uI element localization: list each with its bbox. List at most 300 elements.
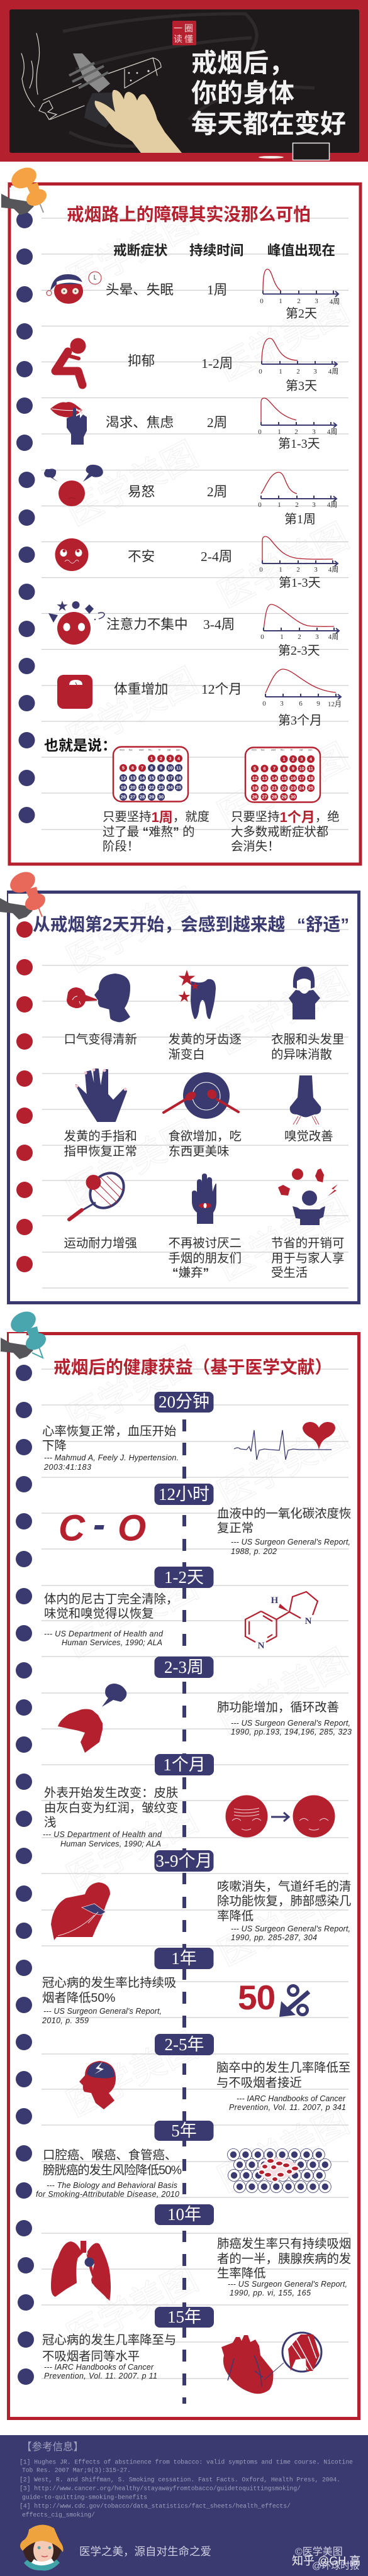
milestone: 5 years: --- The Biology and Behavioral Basis — [47, 2181, 177, 2190]
text: 医学美图 — [60, 2025, 204, 2124]
milestone: 3-9 months — [51, 1850, 351, 1942]
milestone: 20 minutes: 下降 — [42, 1439, 67, 1453]
pin: coral — [0, 868, 48, 919]
chart: day 2 peak: 3 — [315, 297, 318, 305]
blackboard — [9, 9, 359, 153]
calendar: one week: 19 — [121, 785, 126, 790]
calendar: one week: 18 — [176, 775, 181, 781]
chart: week 1 peak: 2 — [295, 501, 299, 509]
calendar: one week: 25 — [176, 785, 181, 790]
header: blackboard banner — [0, 0, 368, 162]
row: dizziness, insomnia — [47, 269, 340, 321]
text: 医学美图 — [211, 516, 355, 615]
icon: angry face — [44, 465, 103, 506]
icon: depressed person — [55, 338, 86, 385]
timeline dashes — [182, 1419, 186, 2404]
item: sense of smell — [284, 1075, 333, 1143]
calendar: one week: 1 — [150, 756, 153, 761]
column headers: 戒断症状 — [113, 243, 168, 258]
calendar: one month: 3 — [300, 756, 303, 762]
icon: nicotine molecule — [245, 1592, 318, 1651]
chart: days 2-3 peak: 1 — [280, 633, 284, 641]
panel title: 戒烟路上的障碍其实没那么可怕 — [67, 205, 311, 224]
title — [191, 48, 346, 138]
calendar: one week: 4 — [177, 756, 181, 761]
calendar: one week: 22 — [149, 785, 154, 790]
time pill: 1-2天 — [164, 1568, 204, 1587]
row: dizziness, insomnia: 头晕、失眠 — [106, 282, 174, 297]
item: savings: 受生活 — [271, 1266, 308, 1280]
calendar: one month: sun — [308, 748, 312, 751]
milestone: 1 year: 冠心病的发生率比持续吸 — [42, 1976, 176, 1990]
milestone: 1 month: 由灰白变为红润，皱纹变 — [44, 1801, 178, 1815]
icon: tooth with stars — [179, 970, 216, 1019]
row: irritability: 2周 — [207, 484, 227, 499]
milestone: 3-9 months: 咳嗽消失，气道纤毛的清 — [217, 1880, 351, 1894]
chart: month 3 peak: 9 — [316, 700, 320, 708]
chart: days 2-3 peak: 2 — [298, 633, 301, 641]
calendar: one week — [113, 747, 188, 801]
milestone: 3-9 months: 除功能恢复，肺部感染几 — [217, 1894, 351, 1908]
item: hands and nails: 发黄的手指和 — [64, 1130, 137, 1143]
row: difficulty concentrating — [48, 601, 339, 658]
chart: day 3 peak: 2 — [296, 368, 300, 375]
milestone: 10 years: 生率降低 — [217, 2267, 266, 2280]
calendar: one month: 6 — [263, 766, 266, 771]
calendar: one month: 4 — [309, 756, 313, 762]
row: restlessness — [55, 536, 338, 590]
milestone: 2-3 weeks: --- US Surgeon General's Report, — [231, 1719, 350, 1728]
item: whiter teeth — [169, 970, 242, 1062]
item: fresh breath — [64, 974, 137, 1046]
calendar: one month: 14 — [272, 775, 277, 781]
item: savings — [271, 1169, 344, 1280]
item: exercise endurance: 运动耐力增强 — [64, 1236, 137, 1250]
icon: head with brain bolt — [79, 2061, 116, 2109]
text: one week note: 只要坚持1周，就度 — [103, 809, 209, 825]
row: weight gain: 第3个月 — [278, 713, 322, 728]
calendar: one month: 5 — [254, 766, 256, 771]
milestone: 15 years — [42, 2307, 321, 2394]
text: 医学美图 — [60, 1113, 204, 1213]
item: savings: 用于与家人享 — [271, 1252, 344, 1265]
text: 医学美图 — [60, 434, 204, 533]
pin: teal — [1, 1307, 49, 1359]
calendar: one month: 21 — [272, 785, 277, 791]
icon: woman silhouette — [289, 967, 320, 1019]
text: one week note: 阶段！ — [103, 840, 139, 853]
stamp: 一圈 — [174, 23, 195, 33]
milestone: 10 years: 1990, pp. vi, 155, 165 — [230, 2289, 311, 2297]
chart: day 2 peak: 2 — [297, 297, 301, 305]
calendar: one week: sun — [176, 748, 180, 751]
item: odor disappears: 的异味消散 — [271, 1048, 332, 1062]
row: depression — [55, 338, 338, 393]
time pill: 15年 — [167, 2307, 201, 2326]
calendar: one week: 21 — [140, 785, 145, 790]
icon: person with hobbies — [278, 1169, 338, 1225]
chart: days 1-3 peak — [259, 536, 338, 574]
text: 医学美图 — [60, 1566, 204, 1665]
milestone: 2-5 years: --- IARC Handbooks of Cancer — [237, 2094, 346, 2103]
milestone: 3-9 months: 1990, pp. 285-287, 304 — [231, 1933, 317, 1942]
calendar: one month: wed — [271, 748, 276, 751]
text: 医学美图 — [211, 2101, 355, 2200]
chart: days 2-3 peak: 3 — [315, 633, 319, 641]
panel title: 从戒烟第2天开始， — [33, 914, 182, 935]
text: 医学美图 — [211, 289, 355, 389]
text: 医学美图 — [60, 201, 204, 301]
chart: week 1 peak: 3 — [312, 501, 316, 509]
milestone: 1 month: Human Services, 1990; ALA — [60, 1840, 161, 1848]
icon: ECG and heart — [234, 1422, 335, 1460]
row: difficulty concentrating: 第2-3天 — [278, 643, 320, 658]
calendar: one week: 2 — [160, 756, 162, 761]
calendar: one month: 2 — [292, 756, 294, 762]
milestone: 5 years: for Smoking-Attributable Disease, 2010 — [36, 2190, 179, 2199]
row: craving, anxiety: 2周 — [207, 415, 227, 430]
calendar: one month — [245, 747, 320, 802]
calendar: one month: 26 — [252, 794, 257, 800]
milestone: 5 years: 口腔癌、喉癌、食管癌、 — [43, 2148, 177, 2162]
icon: palm with eye — [192, 1174, 216, 1224]
calendar: one week: 8 — [150, 765, 153, 771]
text: 医学美图 — [60, 1799, 204, 1898]
chart: days 1-3 peak — [258, 398, 337, 436]
item: whiter teeth: 发黄的牙齿逐 — [169, 1033, 242, 1046]
milestone: 2-5 years: 与不吸烟者接近 — [216, 2076, 302, 2090]
milestone: 10 years: 肺癌发生率只有持续吸烟 — [217, 2237, 351, 2251]
chalk tray — [259, 143, 330, 160]
row: craving, anxiety: 第1-3天 — [278, 436, 320, 451]
chart: days 1-3 peak: 4周 — [328, 565, 338, 574]
item: no secondhand smoke: “嫌弃” — [172, 1266, 209, 1280]
chart: days 1-3 peak: 4周 — [327, 428, 337, 436]
icon: nicotine molecule: H — [271, 1596, 279, 1606]
milestone: 15 years: 不吸烟者同等水平 — [42, 2350, 140, 2363]
milestone: 1 year — [42, 1948, 309, 2025]
milestone: 2-5 years — [79, 2034, 350, 2112]
milestone: 1 year: 烟者降低50% — [42, 1991, 115, 2005]
calendar: one month: 24 — [299, 785, 304, 791]
milestone: 2-5 years: Prevention, Vol. 11. 2007, p 341 — [229, 2103, 346, 2112]
row: irritability: 易怒 — [128, 484, 155, 499]
text: 医学美图 — [211, 1641, 355, 1741]
time pill: 1个月 — [163, 1755, 206, 1774]
calendar: one week: mon — [120, 748, 125, 751]
milestone: 1-2 days: --- US Department of Health and — [44, 1629, 164, 1638]
chart: day 2 peak: 4周 — [330, 297, 340, 306]
calendar: one week: 10 — [167, 765, 173, 771]
icon: tennis racket — [69, 1167, 131, 1219]
row: craving, anxiety: 渴求、焦虑 — [106, 415, 174, 430]
icon: head with breath — [67, 974, 130, 1022]
calendar: one week: sat — [167, 748, 171, 751]
row: weight gain: 12个月 — [201, 682, 242, 697]
item: no secondhand smoke: 不再被讨厌二 — [169, 1236, 242, 1250]
watermark credits: @环球时报 — [312, 2561, 359, 2571]
watermark credits: ©医学美图 — [295, 2546, 343, 2557]
milestone: 20 minutes: 2003:41:183 — [43, 1463, 91, 1472]
item: savings: 节省的开销可 — [271, 1236, 344, 1250]
chart: days 1-3 peak: 3 — [312, 428, 316, 436]
chart: month 3 peak — [262, 669, 342, 708]
milestone: 10 years: --- US Surgeon General's Report, — [228, 2280, 347, 2289]
calendar: one month: 12 — [252, 775, 257, 781]
milestone: 1 year: --- US Surgeon General's Report, — [43, 2007, 162, 2016]
calendar: one week: 9 — [160, 765, 162, 771]
text: 医学美图 — [211, 1189, 355, 1288]
text: one week note — [103, 809, 209, 853]
chart: day 2 peak: 0 — [260, 297, 264, 305]
stamp — [172, 21, 196, 45]
column headers: 峰值出现在 — [267, 243, 335, 258]
chart: day 2 peak: 1 — [279, 297, 282, 305]
item: odor disappears — [271, 967, 344, 1062]
watermark credits — [292, 2546, 360, 2571]
calendar: one week: 5 — [122, 765, 125, 771]
reference list: effects_cig_smoking/ — [22, 2512, 95, 2518]
text: one week note: 过了最 “难熬” 的 — [103, 825, 195, 839]
reference list: Tob Res. 2007 Mar;9(3):315-27. — [22, 2467, 131, 2474]
calendar: one week: 15 — [149, 775, 154, 781]
time pill — [155, 2307, 214, 2328]
calendar: one month: 7 — [273, 766, 276, 771]
time pill: 12小时 — [159, 1485, 209, 1504]
chart: day 3 peak: 3 — [313, 368, 317, 375]
milestone: 1 year: 2010, p. 359 — [42, 2016, 89, 2025]
chart: days 2-3 peak: 0 — [260, 633, 264, 641]
chart: month 3 peak: 6 — [299, 700, 303, 708]
milestone: 2-3 weeks: 肺功能增加，循环改善 — [217, 1701, 339, 1714]
row: irritability — [44, 465, 337, 526]
chart: week 1 peak: 4周 — [327, 501, 337, 509]
slogan: 医学之美，源自对生命之爱 — [79, 2545, 211, 2558]
row: depression: 1-2周 — [201, 356, 233, 371]
calendar: one week: 27 — [130, 794, 135, 800]
row: difficulty concentrating: 3-4周 — [203, 617, 235, 632]
chart: days 1-3 peak: 2 — [296, 566, 300, 574]
icon: cells — [228, 2148, 331, 2192]
calendar: one month: 25 — [308, 785, 313, 791]
milestone: 10 years: 者的一半，胰腺疾病的发 — [217, 2252, 351, 2266]
chart: days 2-3 peak: 4周 — [328, 633, 338, 641]
panel: withdrawal symptoms — [1, 164, 360, 864]
calendar: one month: 30 — [291, 794, 296, 800]
time pill: 2-5年 — [165, 2035, 204, 2054]
calendar: one week: 20 — [130, 785, 135, 790]
chart: days 1-3 peak: 0 — [259, 566, 263, 574]
calendar: one week: tue — [129, 748, 133, 751]
panel title: 戒烟后的健康获益（基于医学文献） — [53, 1357, 332, 1377]
milestone: 1-2 days: 体内的尼古丁完全清除， — [44, 1592, 178, 1606]
milestone: 5 years — [36, 2121, 331, 2199]
reference list: guide-to-quitting-smoking-benefits — [22, 2494, 147, 2501]
milestone: 5 years: 膀胱癌的发生风险降低50% — [43, 2163, 182, 2177]
icon: plate with spoons — [164, 1072, 238, 1119]
time pill — [155, 1754, 214, 1775]
icon: nose — [290, 1075, 321, 1124]
text: 医学美图 — [60, 1340, 204, 1439]
row: craving, anxiety — [50, 398, 337, 451]
item: whiter teeth: 渐变白 — [169, 1048, 205, 1062]
calendar: one week: 14 — [140, 775, 145, 781]
calendar: one month: 10 — [299, 766, 304, 771]
calendar: one month: 28 — [272, 794, 277, 800]
calendar: one month: 13 — [262, 775, 267, 781]
calendar: one week: 29 — [149, 794, 154, 800]
text: 医学美图 — [60, 2258, 204, 2357]
calendar: one week: fri — [159, 748, 160, 751]
text: 医学美图 — [60, 880, 204, 980]
time pill — [155, 1657, 214, 1678]
calendar: one month: 11 — [308, 766, 313, 771]
calendar: one month: tue — [261, 748, 265, 751]
calendar: one month: 20 — [262, 785, 267, 791]
item: exercise endurance — [64, 1167, 137, 1250]
calendar: one month: mon — [252, 748, 257, 751]
icon: lips and hand — [50, 402, 87, 445]
milestone: 2-3 weeks — [58, 1657, 352, 1753]
item: no secondhand smoke — [169, 1174, 242, 1280]
milestone: 20 minutes: --- Mahmud A, Feely J. Hypertension. — [44, 1453, 179, 1462]
panel: health benefits timeline — [1, 1307, 359, 2419]
calendar: one month: 17 — [299, 775, 304, 781]
chart: days 2-3 peak — [260, 604, 339, 641]
icon: scale — [57, 675, 92, 709]
icon: lungs with tumor — [51, 2241, 111, 2301]
chart: days 1-3 peak: 3 — [314, 566, 318, 574]
chart: day 3 peak: 0 — [259, 368, 262, 375]
milestone: 1 month: 浅 — [44, 1816, 56, 1829]
calendar: one week: 16 — [159, 775, 164, 781]
chart: day 3 peak — [259, 338, 338, 375]
column headers: 持续时间 — [189, 243, 243, 258]
milestone: 12 hours: 1988, p. 202 — [231, 1547, 277, 1556]
chart: days 1-3 peak: 1 — [279, 566, 282, 574]
chart: week 1 peak: 0 — [258, 501, 262, 509]
chart: month 3 peak: 12月 — [328, 701, 342, 708]
chart: week 1 peak — [258, 472, 337, 509]
calendar: one week: 23 — [159, 785, 164, 790]
time pill — [155, 2121, 214, 2141]
footer: references — [0, 2435, 368, 2576]
calendar: one month: 23 — [291, 785, 296, 791]
row: weight gain: 体重增加 — [114, 682, 168, 697]
icon: 50 percent down — [238, 1978, 309, 2017]
row: weight gain — [57, 669, 342, 728]
calendar: one month: 19 — [252, 785, 257, 791]
pin: orange — [1, 164, 50, 215]
item: sense of smell: 嗅觉改善 — [284, 1130, 333, 1143]
calendar: one month: 27 — [262, 794, 267, 800]
stamp: 读懂 — [174, 34, 195, 44]
calendar: one week: 7 — [141, 765, 143, 771]
row: restlessness: 第1-3天 — [279, 575, 321, 590]
calendar: one month: 1 — [282, 756, 286, 762]
item: hands and nails: 指甲恢复正常 — [64, 1145, 137, 1158]
milestone: 15 years: 冠心病的发生几率降至与 — [42, 2333, 176, 2347]
milestone: 3-9 months: 率降低 — [217, 1909, 254, 1923]
chart: day 3 peak: 1 — [279, 368, 282, 375]
milestone: 1 month — [43, 1754, 335, 1848]
milestone: 20 minutes: 心率恢复正常，血压开始 — [42, 1424, 176, 1438]
time pill — [155, 1567, 214, 1588]
chart: days 1-3 peak: 2 — [294, 428, 298, 436]
calendar: one month: 8 — [282, 766, 286, 771]
icon: nicotine molecule: N — [258, 1641, 265, 1651]
panel title: “舒适” — [297, 914, 349, 935]
milestone: 2-3 weeks: 1990, pp.193, 194,196, 285, 323 — [231, 1728, 352, 1736]
chart: day 2 peak — [260, 269, 340, 306]
milestone: 12 hours — [59, 1484, 351, 1556]
milestone: 1-2 days: Human Services, 1990; ALA — [62, 1638, 162, 1647]
row: dizziness, insomnia: 第2天 — [286, 306, 317, 321]
CO label: - — [93, 1504, 105, 1545]
icon: distracted face — [48, 601, 104, 645]
CO label — [59, 1504, 146, 1548]
panel title: 会感到越来越 — [181, 914, 285, 935]
milestone: 2-5 years: 脑卒中的发生几率降低至 — [216, 2061, 350, 2075]
icon: faces before and after — [225, 1795, 335, 1838]
subheading: 也就是说： — [44, 737, 116, 753]
watermark credits: 知乎 @GH 高 — [292, 2555, 360, 2567]
icon: nicotine molecule: N — [305, 1616, 312, 1626]
item: fresh breath: 口气变得清新 — [64, 1033, 137, 1046]
calendar: one week: 26 — [121, 794, 126, 800]
column headers — [113, 243, 335, 258]
panel title — [33, 914, 349, 935]
time pill: 3-9个月 — [156, 1852, 213, 1870]
icon: anxious face — [55, 538, 88, 571]
text: one month note — [231, 809, 340, 853]
milestone: 1-2 days — [44, 1567, 318, 1651]
reference list: [4] http://www.cdc.gov/tobacco/data_statistics/fact_sheets/health_effects/ — [20, 2503, 291, 2509]
calendar: one week: 6 — [131, 765, 134, 771]
milestone: 1 month: --- US Department of Health and — [43, 1830, 162, 1839]
chart: week 1 peak: 1 — [277, 501, 281, 509]
row: dizziness, insomnia: 1周 — [207, 282, 227, 297]
illustration: chalk cigarette — [21, 33, 161, 119]
reference list: [3] http://www.cancer.org/healthy/stayawayfromtobacco/guidetoquittingsmoking/ — [20, 2485, 301, 2492]
row: irritability: 第1周 — [284, 512, 316, 526]
title: 戒烟后， — [191, 48, 294, 77]
calendar: one week: 11 — [176, 765, 181, 771]
row: difficulty concentrating: 注意力不集中 — [106, 617, 188, 632]
chart: day 3 peak: 4周 — [328, 367, 338, 375]
item: no secondhand smoke: 手烟的朋友们 — [169, 1252, 242, 1265]
calendar: one week: 12 — [121, 775, 126, 781]
item: appetite: 东西更美味 — [169, 1145, 229, 1158]
row: restlessness: 不安 — [128, 549, 155, 564]
row: depression: 第3天 — [286, 379, 317, 393]
row: restlessness: 2-4周 — [201, 549, 232, 564]
avatar — [20, 2524, 63, 2571]
calendar: one week: thu — [148, 748, 152, 751]
CO label: C — [59, 1508, 86, 1548]
calendar: one month: 22 — [281, 785, 287, 791]
text: 医学美图 — [211, 736, 355, 835]
illustration: hand with eraser — [84, 90, 182, 153]
calendar: one month: 18 — [308, 775, 313, 781]
item: odor disappears: 衣服和头发里 — [271, 1033, 344, 1046]
text: one month note: 大多数戒断症状都 — [231, 825, 328, 839]
milestone: 1-2 days: 味觉和嗅觉得以恢复 — [44, 1607, 154, 1621]
CO label: O — [118, 1508, 146, 1548]
milestone: 12 hours: 血液中的一氧化碳浓度恢 — [217, 1507, 351, 1521]
text: 医学美图 — [60, 660, 204, 760]
text: 医学美图 — [211, 1874, 355, 1974]
